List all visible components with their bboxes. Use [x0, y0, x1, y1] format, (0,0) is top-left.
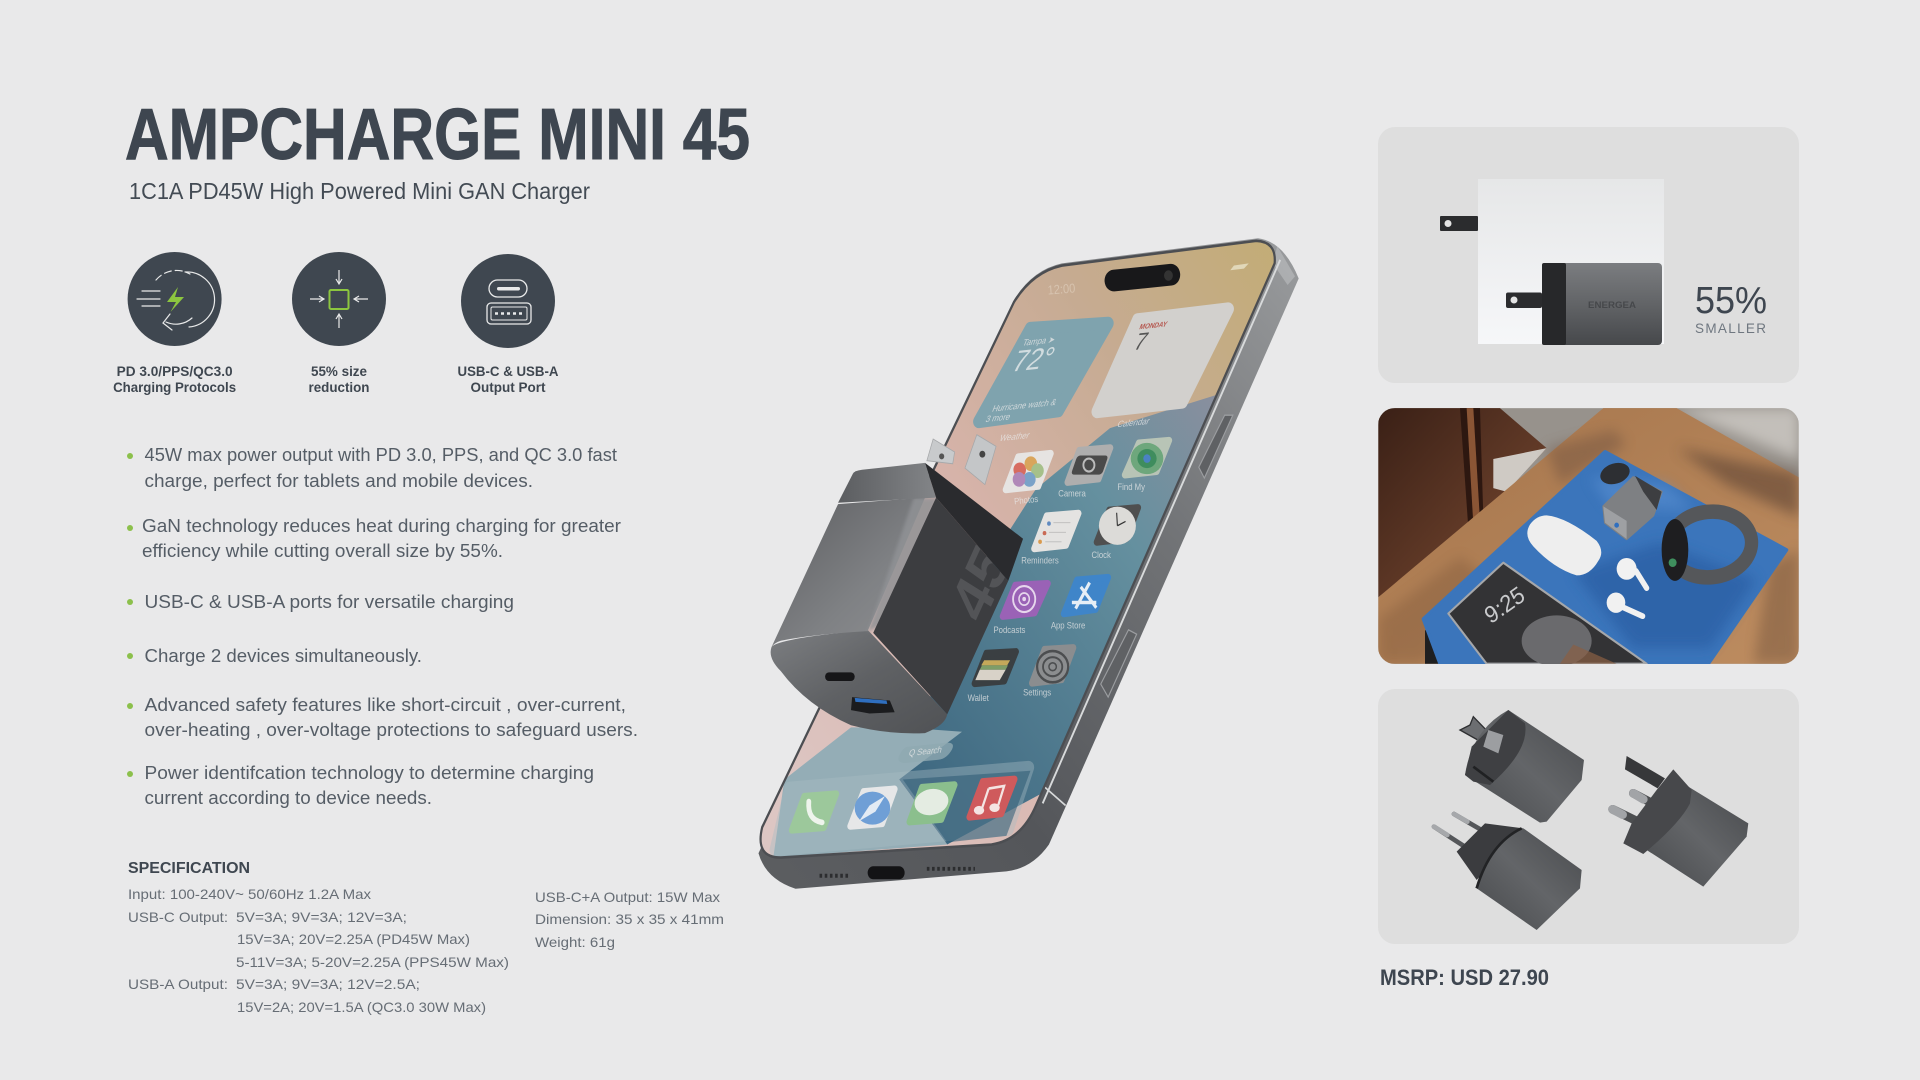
widget: weather: Hurricane watch &	[991, 397, 1058, 414]
widget: weather: 72°	[1007, 341, 1060, 379]
specification left column: 5V=3A; 9V=3A; 12V=2.5A;	[236, 976, 420, 992]
subtitle: 1C1A PD45W High Powered Mini GAN Charger	[129, 178, 590, 204]
widget: weather: 3 more	[984, 411, 1012, 424]
white large charger	[1478, 179, 1664, 344]
specification heading: SPECIFICATION	[128, 860, 250, 877]
charger cap band	[838, 463, 936, 503]
app: clock: Clock	[1092, 549, 1112, 560]
charger left face	[771, 498, 925, 647]
widget: calendar	[1097, 309, 1228, 412]
specification left column: 15V=2A; 20V=1.5A (QC3.0 30W Max)	[237, 999, 486, 1015]
specification block	[128, 860, 724, 1015]
label: output ports	[458, 364, 559, 395]
bullet: power output: charge, perfect for tablets and mobile devices.	[144, 471, 533, 491]
icon: charging protocols	[128, 252, 222, 346]
dock app: music	[969, 779, 1015, 817]
label: output ports: Output Port	[470, 380, 546, 395]
specification left column: USB-A Output:	[128, 976, 228, 992]
search pill	[909, 742, 953, 762]
widget: weather: Tampa ➤	[1021, 334, 1058, 348]
specification left column	[128, 886, 509, 1015]
feature icons row	[113, 252, 559, 395]
small dark charger: ENERGEA	[1588, 300, 1637, 310]
specification right column: Weight: 61g	[535, 934, 615, 950]
app: find my: Find My	[1117, 481, 1146, 492]
icon: output ports	[461, 254, 555, 348]
specification left column: 5-11V=3A; 5-20V=2.25A (PPS45W Max)	[236, 954, 509, 970]
bullet: two devices: Charge 2 devices simultaneously.	[144, 646, 422, 666]
hero: phone with charger	[740, 220, 1299, 889]
price: MSRP: USD 27.90	[1380, 965, 1549, 990]
widget labels	[1000, 418, 1150, 441]
app: settings	[1023, 648, 1073, 697]
dock app: safari	[850, 789, 895, 826]
label: size reduction	[308, 364, 370, 395]
bullet: GaN technology	[127, 516, 621, 561]
bullet: safety: Advanced safety features like short-circuit , over-current,	[144, 695, 626, 715]
widget: calendar: 7	[1130, 327, 1152, 355]
photo backdrop	[1378, 408, 1799, 664]
panel: 55% smaller comparison	[1378, 127, 1799, 383]
small dark charger	[1506, 263, 1662, 345]
title: AMPCHARGE MINI 45	[125, 95, 750, 175]
charger ports	[825, 672, 895, 714]
camera cutout	[1600, 462, 1630, 484]
charger: US plug	[1460, 710, 1584, 823]
dynamic island	[1104, 263, 1181, 292]
specification right column	[535, 889, 724, 950]
stat caption: smaller: SMALLER	[1695, 321, 1766, 336]
app: photos: Photos	[1014, 493, 1039, 506]
widget: calendar: MONDAY	[1138, 320, 1169, 331]
specification left column: 5V=3A; 9V=3A; 12V=3A;	[236, 909, 407, 925]
app: camera	[1058, 448, 1110, 498]
smart watch	[1662, 508, 1754, 581]
bullet: power identification: Power identifcation technology to determine charging	[144, 763, 594, 783]
phone on mat: 9:25	[1480, 581, 1529, 629]
bullet: GaN technology: efficiency while cutting overall size by 55%.	[142, 541, 503, 561]
app: settings: Settings	[1023, 687, 1051, 697]
label: charging protocols: PD 3.0/PPS/QC3.0	[117, 364, 233, 379]
phone on mat	[1448, 563, 1647, 666]
charger bottom face	[771, 630, 947, 733]
large charger prong	[1440, 216, 1478, 231]
app: photos	[1006, 453, 1051, 506]
earbud case	[1527, 515, 1601, 575]
label: output ports: USB-C & USB-A	[458, 364, 559, 379]
charger right face	[873, 498, 1008, 714]
bottom port and speakers	[868, 866, 905, 879]
bullet: GaN technology: GaN technology reduces heat during charging for greater	[142, 516, 621, 536]
dock app: messages	[909, 785, 955, 822]
app: app store	[1051, 577, 1108, 631]
charger: EU plug	[1434, 814, 1582, 930]
app: wallet	[968, 652, 1016, 703]
charger 45 mark: 45	[938, 534, 1022, 632]
blue mat	[1423, 452, 1787, 664]
bullet: safety: over-heating , over-voltage protections to safeguard users.	[144, 720, 638, 740]
specification right column: USB-C+A Output: 15W Max	[535, 889, 720, 905]
label: size reduction: 55% size	[311, 364, 367, 379]
search pill: Q Search	[908, 744, 943, 758]
bullet: power identification	[127, 763, 594, 808]
label: charging protocols	[113, 364, 236, 395]
icon: size reduction	[292, 252, 386, 346]
bullet: ports: USB-C & USB-A ports for versatile charging	[144, 592, 514, 612]
widget: weather	[979, 323, 1108, 424]
stat: 55%: 55%	[1695, 280, 1767, 322]
specification right column: Dimension: 35 x 35 x 41mm	[535, 911, 724, 927]
earbuds	[1607, 558, 1647, 616]
app: podcasts	[993, 583, 1048, 635]
phone screen	[762, 242, 1274, 856]
bullet: power output	[127, 445, 617, 491]
widget labels: Calendar	[1116, 416, 1151, 429]
hero charger	[771, 435, 1023, 733]
specification left column: USB-C Output:	[128, 909, 228, 925]
app: clock	[1092, 507, 1138, 560]
dock app: phone	[792, 794, 836, 830]
widget labels: Weather	[998, 430, 1031, 443]
app: camera: Camera	[1058, 488, 1086, 498]
label: size reduction: reduction	[308, 380, 370, 395]
specification left column: Input: 100-240V~ 50/60Hz 1.2A Max	[128, 886, 371, 902]
charger: UK plug	[1613, 756, 1748, 887]
bullet: power output: 45W max power output with PD 3.0, PPS, and QC 3.0 fast	[144, 445, 617, 465]
panel: lifestyle photo	[1378, 408, 1799, 666]
panel: plug variants	[1378, 689, 1799, 944]
side buttons	[1101, 415, 1233, 697]
feature bullet list	[127, 445, 638, 808]
bullet: safety	[127, 695, 638, 740]
app: podcasts: Podcasts	[993, 624, 1025, 635]
specification left column: 15V=3A; 20V=2.25A (PD45W Max)	[237, 931, 470, 947]
status bar: 12:00	[1047, 281, 1076, 298]
app: app store: App Store	[1051, 620, 1086, 631]
charger highlight edge	[868, 498, 938, 632]
screen bezel	[761, 241, 1275, 858]
app: find my	[1117, 440, 1169, 492]
label: charging protocols: Charging Protocols	[113, 380, 236, 395]
mini charger on mat	[1603, 476, 1662, 539]
phone body	[758, 238, 1299, 889]
app: reminders	[1021, 513, 1079, 566]
bullet: power identification: current according to device needs.	[144, 788, 432, 808]
app: reminders: Reminders	[1021, 555, 1059, 566]
wooden table	[1378, 408, 1799, 664]
app: wallet: Wallet	[968, 692, 989, 703]
charger prongs	[927, 435, 996, 485]
